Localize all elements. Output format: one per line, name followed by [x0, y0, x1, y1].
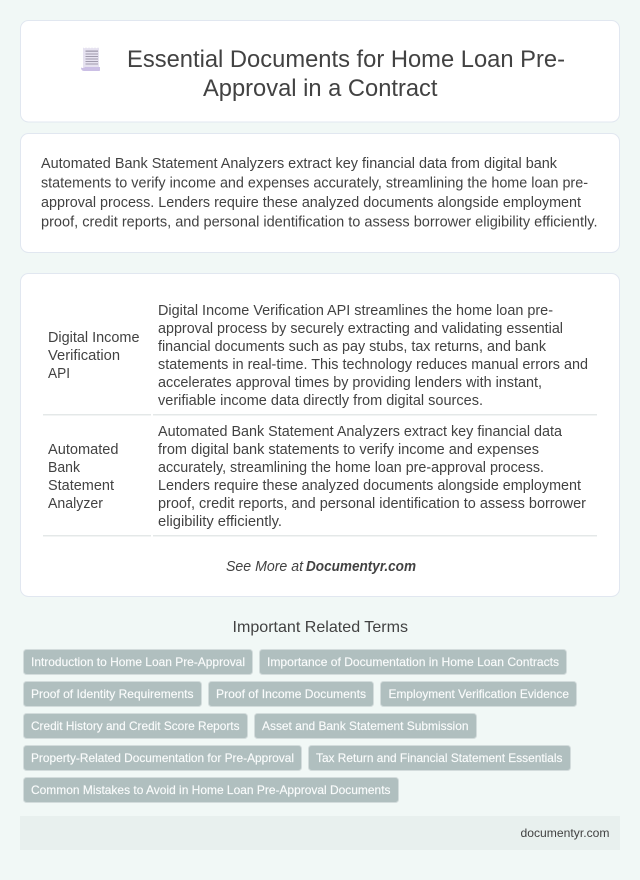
intro text — [41, 155, 598, 230]
term: Automated Bank Statement Analyzer — [48, 441, 118, 512]
heading: Important Related Terms: Important Related Terms — [232, 619, 408, 636]
see more link — [226, 558, 416, 575]
description: Digital Income Verification API: verifiable income data directly from digital sources. — [158, 392, 483, 409]
tag — [24, 746, 302, 770]
intro text: Automated Bank Statement Analyzers extract key financial data from digital bank — [41, 155, 557, 172]
tag — [24, 714, 248, 738]
description: Digital Income Verification API: financial documents such as pay stubs, tax returns, and bank — [158, 338, 546, 355]
term: Automated Bank Statement Analyzer: Automated — [48, 441, 118, 458]
term: Digital Income Verification API — [48, 329, 140, 382]
title: Approval in a Contract — [203, 75, 438, 102]
tag — [254, 714, 476, 738]
tag: Introduction to Home Loan Pre-Approval — [31, 655, 245, 669]
tag — [24, 778, 398, 802]
tag: Credit History and Credit Score Reports — [31, 719, 240, 733]
icon: document receipt — [81, 48, 100, 71]
tag: Proof of Income Documents — [216, 687, 366, 701]
tag: Common Mistakes to Avoid in Home Loan Pre-Approval Documents — [31, 783, 390, 797]
tag — [24, 682, 202, 706]
tag — [260, 650, 566, 674]
term: Digital Income Verification API: API — [48, 365, 70, 382]
tag: Employment Verification Evidence — [388, 687, 569, 701]
related terms tags — [24, 650, 576, 802]
tag — [208, 682, 374, 706]
tag — [24, 650, 252, 674]
term: Automated Bank Statement Analyzer: Analyzer — [48, 495, 103, 512]
description: Automated Bank Statement Analyzer: eligibility efficiently. — [158, 513, 282, 530]
tag: Property-Related Documentation for Pre-Approval — [31, 751, 294, 765]
description: Digital Income Verification API: statements in real-time. This technology reduces manual errors and — [158, 356, 588, 373]
description: Automated Bank Statement Analyzer: accurately, streamlining the home loan pre-approval process. — [158, 459, 544, 476]
intro text: approval process. Lenders require these analyzed documents alongside employment — [41, 194, 582, 211]
description: Digital Income Verification API: Digital Income Verification API streamlines the home loan pre- — [158, 302, 553, 319]
footer: documentyr.com — [520, 826, 610, 840]
description: Automated Bank Statement Analyzer — [158, 423, 586, 530]
description: Automated Bank Statement Analyzer: Lenders require these analyzed documents alongside employment — [158, 477, 582, 494]
description: Automated Bank Statement Analyzer: from digital bank statements to verify income and expenses — [158, 441, 539, 458]
description: Automated Bank Statement Analyzer: Automated Bank Statement Analyzers extract key financial data — [158, 423, 563, 440]
table row: Automated Bank Statement Analyzer — [48, 423, 586, 530]
panel: introduction — [20, 134, 620, 252]
term: Digital Income Verification API: Digital Income — [48, 329, 140, 346]
see more link: Documentyr.com — [306, 558, 416, 575]
panel: title card — [20, 20, 620, 122]
description: Automated Bank Statement Analyzer: proof, credit reports, and personal identification to assess borrower — [158, 495, 586, 512]
description: Digital Income Verification API: accelerates approval times by providing lenders with instant, — [158, 374, 542, 391]
table row: Digital Income Verification API — [48, 302, 588, 409]
tag: Asset and Bank Statement Submission — [262, 719, 468, 733]
tag: Proof of Identity Requirements — [31, 687, 194, 701]
intro text: statements to verify income and expenses accurately, streamlining the home loan pre- — [41, 174, 588, 192]
title: Essential Documents for Home Loan Pre- — [127, 46, 565, 73]
description: Digital Income Verification API — [158, 302, 588, 409]
intro text: proof, credit reports, and personal identification to assess borrower eligibility efficiently. — [41, 214, 598, 230]
tag — [380, 682, 576, 706]
panel: terms table — [20, 274, 620, 596]
title — [127, 46, 565, 102]
term: Automated Bank Statement Analyzer: Statement — [48, 477, 115, 494]
tag — [308, 746, 570, 770]
footer — [20, 816, 620, 850]
tag: Tax Return and Financial Statement Essentials — [316, 751, 562, 765]
see more link: See More at — [226, 558, 304, 575]
description: Digital Income Verification API: approval process by securely extracting and validating essential — [158, 320, 563, 337]
term: Automated Bank Statement Analyzer: Bank — [48, 459, 80, 476]
tag: Importance of Documentation in Home Loan Contracts — [267, 655, 559, 669]
term: Digital Income Verification API: Verification — [48, 347, 120, 364]
